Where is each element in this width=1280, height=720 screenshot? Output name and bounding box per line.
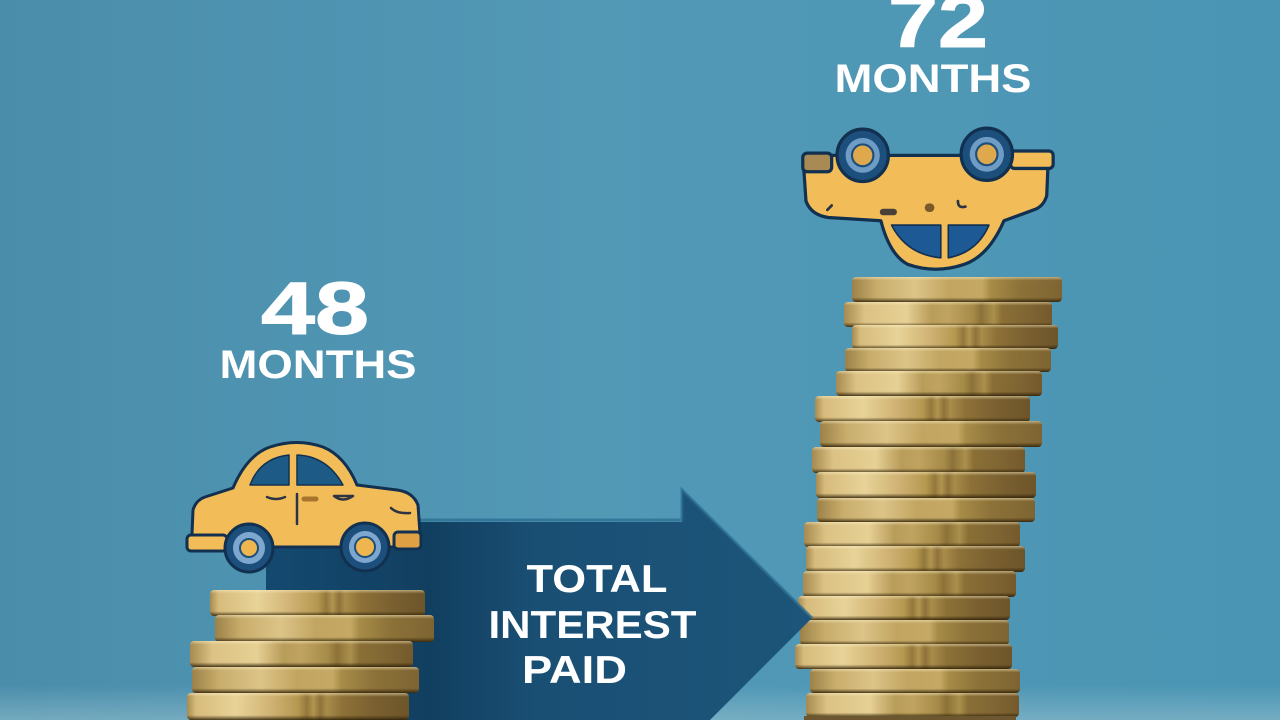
coin stack: 48 months <box>187 590 434 720</box>
arrow: total interest paid <box>266 490 812 720</box>
flipped car bumpers <box>803 151 1053 172</box>
icon: yellow car on 48 month stack <box>187 442 421 572</box>
icon: upside-down yellow car on 72 month stack <box>803 128 1053 269</box>
arrow label <box>488 558 697 692</box>
arrow label: INTEREST <box>488 604 697 647</box>
car wheels <box>225 523 389 572</box>
car windows <box>250 455 343 485</box>
coin stack: 72 months <box>795 277 1062 720</box>
label: 72 months <box>834 0 1032 101</box>
flipped car windows <box>892 225 989 258</box>
label: 48 months: 48 <box>261 267 369 350</box>
arrow label: PAID <box>522 649 627 692</box>
car bumpers <box>187 532 421 551</box>
car body <box>192 442 420 547</box>
flipped car wheels <box>837 128 1012 182</box>
label: 48 months <box>220 267 416 387</box>
label: 72 months: MONTHS <box>834 57 1032 101</box>
label: 48 months: MONTHS <box>220 343 416 387</box>
flipped car body <box>804 155 1048 269</box>
arrow label: TOTAL <box>526 558 668 601</box>
car door details <box>267 494 410 524</box>
flipped car details <box>827 201 965 212</box>
